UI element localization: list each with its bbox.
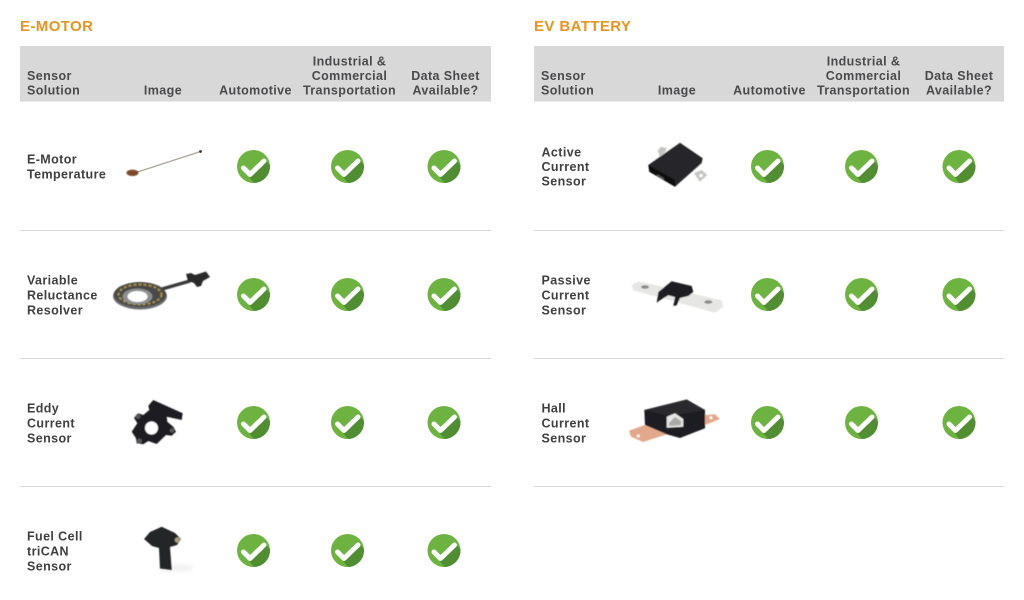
icon: check, data sheet bbox=[428, 150, 470, 192]
row: E-Motor Temperature: Temperature bbox=[27, 168, 106, 182]
table header: E-Motor bbox=[20, 46, 491, 102]
image: active current sensor bbox=[648, 143, 707, 187]
row: Hall Current Sensor bbox=[542, 400, 985, 448]
icon: check, industrial bbox=[331, 534, 374, 576]
row: Fuel Cell triCAN Sensor: Fuel Cell bbox=[27, 530, 83, 544]
table header: E-Motor: Data Sheet bbox=[411, 69, 480, 83]
icon: check, industrial bbox=[331, 406, 374, 448]
row: E-Motor Temperature: E-Motor bbox=[27, 152, 77, 166]
row: Active Current Sensor: Sensor bbox=[542, 174, 586, 188]
icon: check, data sheet bbox=[428, 278, 470, 320]
row: Hall Current Sensor: Current bbox=[542, 416, 590, 430]
table header: EV Battery: Image bbox=[658, 84, 696, 98]
table header: E-Motor: Sensor bbox=[27, 69, 72, 83]
icon: check, industrial bbox=[845, 406, 888, 448]
icon: check, data sheet bbox=[942, 406, 985, 448]
row: Passive Current Sensor: Current bbox=[542, 288, 590, 302]
table header: EV Battery: Sensor bbox=[541, 69, 586, 83]
image: hall current sensor bbox=[629, 400, 720, 442]
row: Fuel Cell triCAN Sensor bbox=[27, 527, 470, 576]
row: Variable Reluctance Resolver: Variable bbox=[27, 274, 78, 288]
row: Eddy Current Sensor: Current bbox=[27, 416, 75, 430]
row: Passive Current Sensor: Sensor bbox=[542, 304, 586, 318]
row: Variable Reluctance Resolver: Reluctance bbox=[27, 288, 98, 302]
table header: E-Motor: Available? bbox=[412, 84, 479, 98]
icon: check, industrial bbox=[845, 150, 888, 192]
icon: check, automotive bbox=[751, 150, 794, 192]
icon: check, automotive bbox=[237, 278, 280, 320]
icon: check, data sheet bbox=[428, 406, 470, 448]
table header: EV Battery: Commercial bbox=[826, 69, 901, 83]
icon: check, automotive bbox=[751, 278, 794, 320]
image: passive current sensor bbox=[632, 281, 723, 313]
table header: E-Motor: Image bbox=[144, 84, 182, 98]
table header: EV Battery: Transportation bbox=[817, 84, 910, 98]
icon: check, data sheet bbox=[428, 534, 470, 576]
image: fuel cell sensor bbox=[144, 527, 194, 572]
table header: EV Battery bbox=[534, 46, 1004, 102]
table header: EV Battery: Automotive bbox=[733, 84, 806, 98]
table header: E-Motor: Transportation bbox=[303, 84, 396, 98]
table header: E-Motor: Solution bbox=[27, 84, 80, 98]
table header: E-Motor: Automotive bbox=[219, 84, 292, 98]
row: Hall Current Sensor: Hall bbox=[542, 402, 566, 416]
row: Eddy Current Sensor: Eddy bbox=[27, 402, 59, 416]
icon: check, automotive bbox=[237, 534, 280, 576]
icon: check, automotive bbox=[751, 406, 794, 448]
row: Passive Current Sensor: Passive bbox=[542, 274, 591, 288]
row: Active Current Sensor: Active bbox=[542, 146, 581, 160]
icon: check, data sheet bbox=[942, 278, 985, 320]
table header: EV Battery: Industrial & bbox=[827, 54, 900, 68]
icon: check, automotive bbox=[237, 406, 280, 448]
table header: EV Battery: Data Sheet bbox=[925, 69, 994, 83]
heading: EV Battery: EV BATTERY bbox=[534, 18, 631, 35]
image: eddy current sensor bbox=[132, 400, 183, 444]
icon: check, automotive bbox=[237, 150, 280, 192]
icon: check, data sheet bbox=[942, 150, 985, 192]
table header: E-Motor: Industrial & bbox=[313, 54, 386, 68]
table header: EV Battery: Available? bbox=[926, 84, 992, 98]
icon: check, industrial bbox=[331, 150, 374, 192]
table header: E-Motor: Commercial bbox=[312, 69, 387, 83]
heading: E-Motor: E-MOTOR bbox=[20, 18, 93, 35]
row: Active Current Sensor bbox=[542, 143, 985, 192]
row: Active Current Sensor: Current bbox=[542, 160, 590, 174]
row: Fuel Cell triCAN Sensor: Sensor bbox=[27, 560, 72, 574]
row: Hall Current Sensor: Sensor bbox=[542, 432, 586, 446]
row: Variable Reluctance Resolver bbox=[27, 272, 470, 320]
image: temperature probe bbox=[126, 150, 202, 176]
row: Variable Reluctance Resolver: Resolver bbox=[27, 304, 83, 318]
table header: EV Battery: Solution bbox=[541, 84, 594, 98]
row: Eddy Current Sensor bbox=[27, 400, 470, 448]
icon: check, industrial bbox=[845, 278, 888, 320]
row: Passive Current Sensor bbox=[542, 274, 985, 320]
icon: check, industrial bbox=[331, 278, 374, 320]
row: E-Motor Temperature bbox=[27, 150, 470, 192]
row: Fuel Cell triCAN Sensor: triCAN bbox=[27, 544, 69, 558]
image: resolver bbox=[113, 272, 210, 310]
row: Eddy Current Sensor: Sensor bbox=[27, 432, 72, 446]
